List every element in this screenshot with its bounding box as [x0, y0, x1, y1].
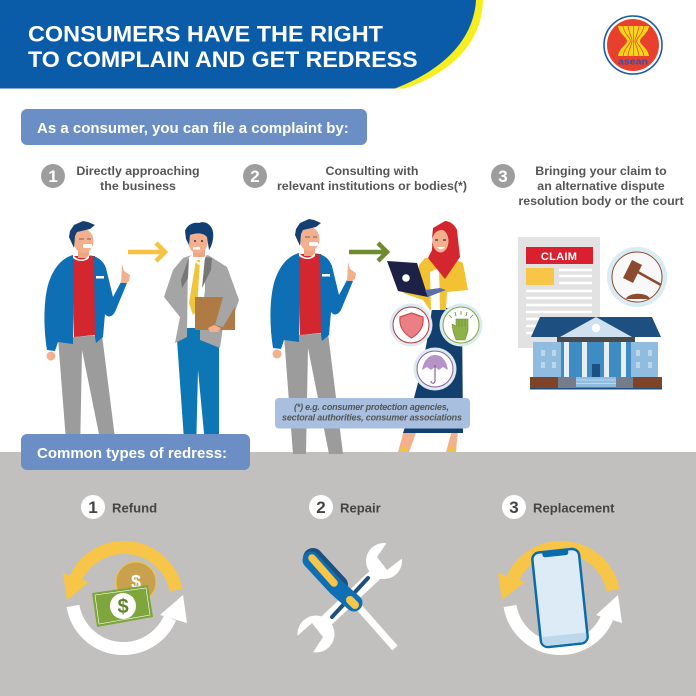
heading: file a complaint [21, 109, 367, 145]
figure: consumer protection officer [387, 221, 468, 452]
title: TO COMPLAIN AND GET REDRESS [28, 47, 418, 72]
icon: refund cycle with money [63, 547, 187, 649]
figure: consumer consulting [270, 219, 356, 454]
step 2: consulting with institutions: Consulting with [326, 164, 418, 178]
icon: refund cycle with money: $ [117, 596, 129, 618]
label: repair: Repair [340, 500, 381, 516]
step 1: directly approaching the business [41, 164, 200, 193]
label: repair: 2 [316, 498, 326, 517]
header banner [0, 0, 483, 88]
arrow: yellow [128, 243, 165, 261]
illustration: court building [530, 317, 662, 390]
figure: consumer complaining to business [44, 221, 130, 454]
callout: examples of institutions [275, 398, 470, 428]
heading: common types of redress [21, 434, 250, 470]
arrow: green [349, 243, 387, 261]
label: replacement [502, 495, 615, 519]
label: refund: Refund [112, 500, 157, 516]
step 3: alternative dispute resolution: 3 [498, 167, 508, 186]
label: refund: 1 [88, 498, 98, 517]
icon: ASEAN logo: asean [618, 56, 648, 68]
step 2: consulting with institutions: relevant institutions or bodies(*) [277, 179, 467, 193]
illustration: claim document: CLAIM [541, 251, 577, 263]
icon: replacement cycle with phone [498, 547, 622, 649]
title: CONSUMERS HAVE THE RIGHT [28, 22, 384, 46]
label: replacement: 3 [509, 498, 519, 517]
step 3: alternative dispute resolution [491, 164, 684, 208]
label: repair [309, 495, 381, 519]
icon: gavel badge [607, 247, 667, 307]
label: refund [81, 495, 157, 519]
figure: business representative [164, 222, 239, 454]
step 1: directly approaching the business: 1 [48, 167, 58, 186]
icon: wrench and screwdriver [295, 541, 404, 654]
icon: umbrella badge [414, 348, 456, 390]
step 1: directly approaching the business: Directly approaching [76, 164, 200, 178]
step 3: alternative dispute resolution: Bringing your claim to [535, 164, 667, 178]
step 1: directly approaching the business: the business [100, 179, 176, 193]
heading: common types of redress: Common types of redress: [37, 445, 227, 462]
icon: raised fist badge [440, 304, 482, 346]
step 3: alternative dispute resolution: resolution body or the court [518, 194, 684, 208]
icon: refund cycle with money: $ [131, 572, 141, 592]
icon: ASEAN logo [604, 16, 662, 74]
callout: examples of institutions: (*) e.g. consumer protection agencies, [294, 402, 449, 412]
icon: shield badge [390, 304, 432, 346]
illustration: claim document [518, 237, 600, 348]
callout: examples of institutions: sectoral authorities, consumer associations [282, 412, 462, 422]
title [28, 22, 418, 72]
heading: file a complaint: As a consumer, you can file a complaint by: [37, 120, 349, 137]
label: replacement: Replacement [533, 500, 615, 516]
step 3: alternative dispute resolution: an alternative dispute [537, 179, 665, 193]
step 2: consulting with institutions [243, 164, 467, 193]
panel: grey redress background [0, 452, 696, 696]
step 2: consulting with institutions: 2 [250, 167, 260, 186]
